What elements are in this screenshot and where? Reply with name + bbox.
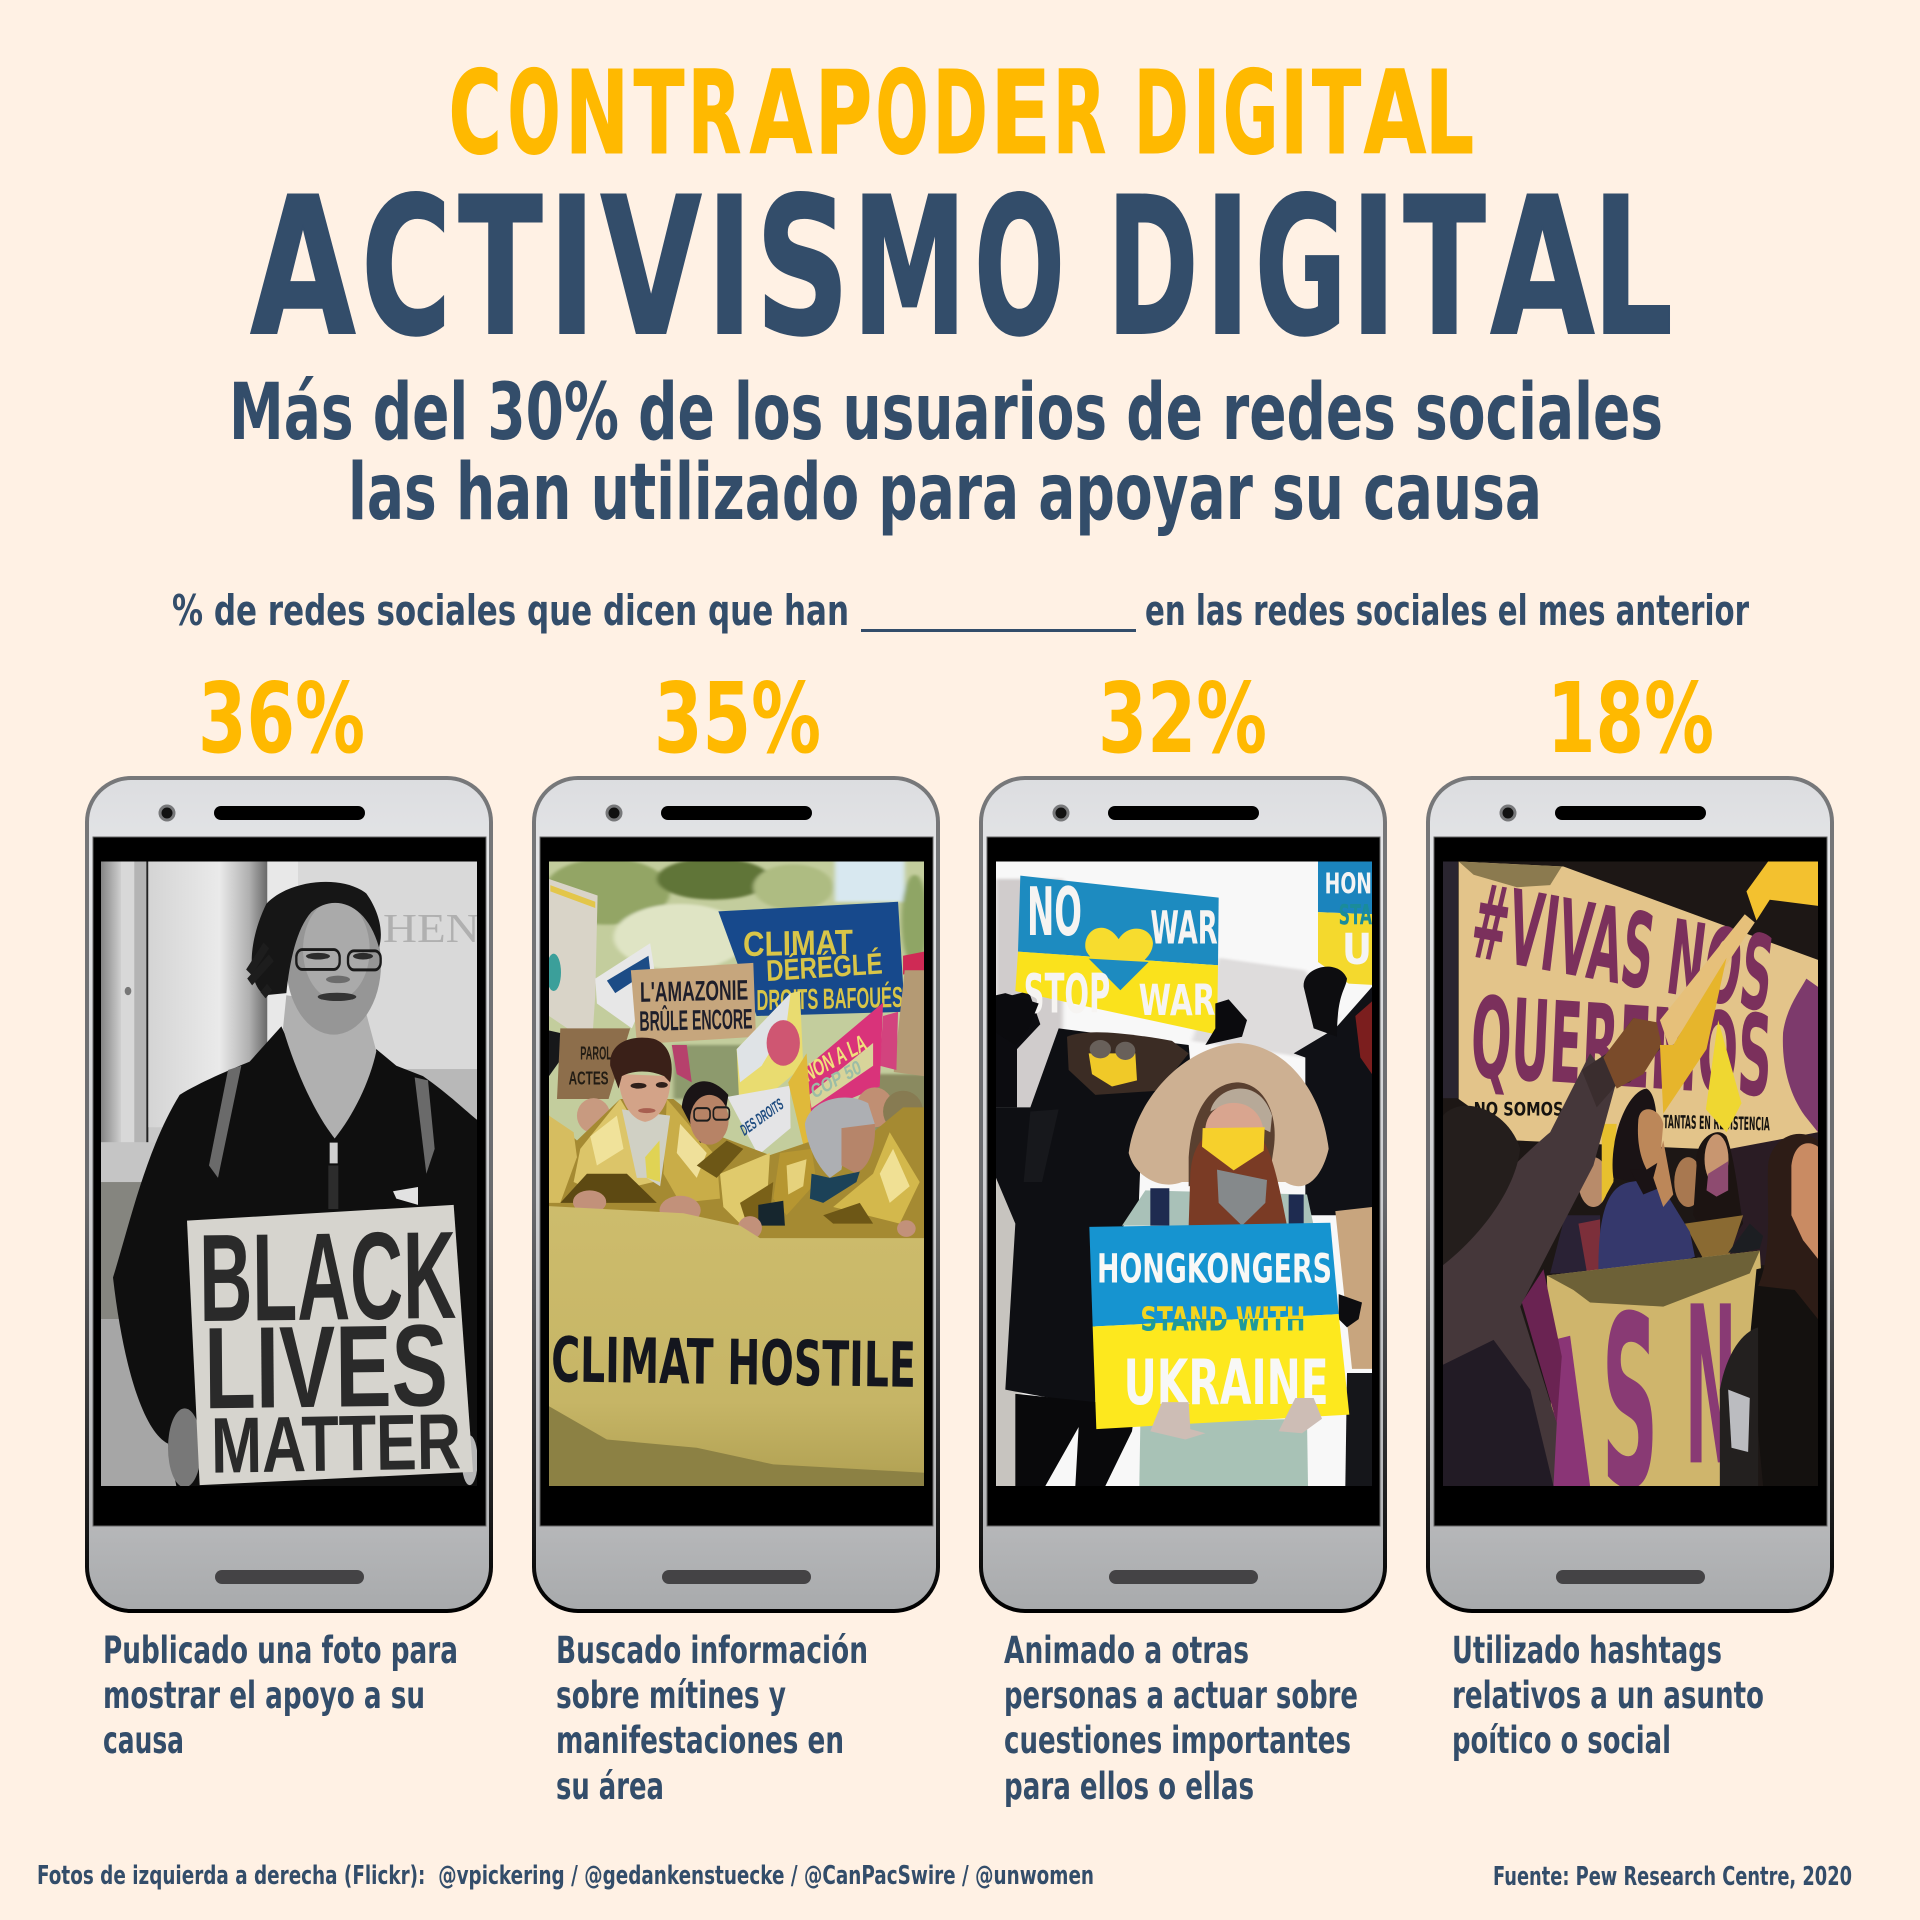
title: Contrapoder digital: C (449, 47, 502, 181)
heading: Activismo digital: A (250, 157, 356, 378)
caption: looked up rallies: manifestaciones en (556, 1719, 844, 1762)
heading: Activismo digital: I (548, 157, 596, 378)
photo: Ukraine solidarity rally: WAR (1150, 901, 1218, 954)
caption: looked up rallies: sobre mítines y (556, 1674, 786, 1717)
caption: used hashtags: Utilizado hashtags (1452, 1629, 1722, 1672)
title: Contrapoder digital: N (565, 47, 629, 181)
caption: encouraged others: cuestiones importantes (1004, 1719, 1351, 1762)
photo: Black Lives Matter protester: HEN (383, 906, 480, 952)
panel: photo post (87, 662, 491, 1762)
heading: Activismo digital: L (1592, 157, 1673, 378)
subtitle (229, 368, 1663, 538)
title: Contrapoder digital: O (876, 47, 928, 181)
title: Contrapoder digital: R (1053, 47, 1106, 181)
photo: Ukraine solidarity rally: STAND WITH (1140, 1301, 1305, 1340)
caption: photo post: mostrar el apoyo a su (103, 1674, 425, 1717)
heading: Activismo digital: T (458, 157, 543, 378)
title: Contrapoder digital: A (750, 47, 812, 181)
caption: used hashtags: poítico o social (1452, 1719, 1671, 1762)
title: Contrapoder digital: R (688, 47, 741, 181)
phone frame (981, 778, 1385, 1611)
photo: Ukraine solidarity rally: HONGKONGERS (1097, 1245, 1332, 1292)
photo: climate march: ACTES (569, 1068, 609, 1089)
caption: looked up rallies: Buscado información (556, 1629, 868, 1672)
survey prompt with blank: % de redes sociales que dicen que han (172, 586, 849, 635)
photo: Ukraine solidarity rally: NO (1027, 874, 1082, 952)
panel: looked up rallies (534, 662, 938, 1808)
footer: photo credits: Fotos de izquierda a derecha (Flickr): @vpickering / @gedankenstuecke / @CanPacSwire / @unwomen (37, 1861, 1094, 1891)
photo: climate march: PAROL (580, 1043, 612, 1064)
photo: climate march: BRÛLE ENCORE (639, 1002, 753, 1038)
caption: encouraged others: para ellos o ellas (1004, 1765, 1254, 1808)
caption: encouraged others: Animado a otras (1004, 1629, 1249, 1672)
heading: Activismo digital: I (1205, 157, 1250, 378)
caption: photo post: Publicado una foto para (103, 1629, 458, 1672)
statistic 36%: 36% (198, 662, 365, 775)
heading: Activismo digital: I (1351, 157, 1396, 378)
phone frame (87, 778, 491, 1611)
title: Contrapoder digital: O (508, 47, 560, 181)
heading: Activismo digital: D (1107, 157, 1198, 378)
caption: encouraged others: personas a actuar sobre (1004, 1674, 1358, 1717)
survey prompt with blank (172, 586, 1749, 635)
photo: Ukraine solidarity rally: U (1342, 925, 1372, 975)
title: Contrapoder digital: L (1425, 47, 1474, 181)
title: Contrapoder digital: I (1192, 47, 1221, 181)
photo: Vivas nos queremos march: NO SOMOS (1474, 1099, 1563, 1120)
photo: climate march: L'AMAZONIE (640, 975, 748, 1008)
panel: used hashtags (1428, 662, 1832, 1762)
photo: Vivas nos queremos march (1443, 862, 1818, 1541)
photo: Black Lives Matter protester: LIVES (204, 1302, 448, 1434)
photo: Ukraine solidarity rally: UKRAINE (1124, 1348, 1329, 1420)
heading: Activismo digital: A (1490, 157, 1595, 378)
photo: Black Lives Matter protester (101, 862, 480, 1490)
heading: Activismo digital: M (852, 157, 966, 378)
heading: Activismo digital: C (361, 157, 451, 378)
statistic 32%: 32% (1098, 662, 1267, 775)
photo: climate march (549, 862, 924, 1486)
photo: Vivas nos queremos march: S (1602, 1266, 1658, 1541)
heading: Activismo digital: S (755, 157, 850, 378)
title: Contrapoder digital: I (1280, 47, 1308, 181)
photo: climate march: COP 50 (808, 1056, 864, 1103)
heading: Activismo digital: O (974, 157, 1065, 378)
caption: photo post: causa (103, 1719, 184, 1762)
phone frame (534, 778, 938, 1611)
caption: used hashtags: relativos a un asunto (1452, 1674, 1764, 1717)
heading: Activismo digital: I (707, 157, 752, 378)
photo: Black Lives Matter protester: MATTER (211, 1398, 462, 1490)
title: Contrapoder digital: P (815, 47, 872, 181)
title: Contrapoder digital: T (634, 47, 684, 181)
photo: Ukraine solidarity rally: STOP (1024, 963, 1110, 1026)
photo: Ukraine solidarity rally: WAR (1139, 977, 1215, 1026)
photo: Ukraine solidarity rally (996, 862, 1372, 1486)
heading: Activismo digital: V (600, 157, 702, 378)
title: Contrapoder digital: T (1312, 47, 1361, 181)
title: Contrapoder digital: E (990, 47, 1051, 181)
photo: climate march: DÉRÉGLÉ (765, 946, 883, 988)
caption: photo post (103, 1629, 458, 1762)
photo: climate march: NON A LA (800, 1028, 870, 1087)
phone frame (1428, 778, 1832, 1611)
statistic 35%: 35% (654, 662, 821, 775)
heading: Activismo digital: T (1403, 157, 1486, 378)
title: Contrapoder digital: G (1223, 47, 1278, 181)
caption: encouraged others (1004, 1629, 1358, 1808)
caption: looked up rallies: su área (556, 1765, 664, 1808)
caption: looked up rallies (556, 1629, 868, 1808)
title: Contrapoder digital: D (933, 47, 988, 181)
title: Contrapoder digital: D (1134, 47, 1189, 181)
statistic 18%: 18% (1547, 662, 1714, 775)
title: Contrapoder digital: A (1364, 47, 1426, 181)
heading: Activismo digital: G (1255, 157, 1347, 378)
caption: used hashtags (1452, 1629, 1764, 1762)
photo: climate march: DES DROITS (738, 1095, 786, 1140)
photo: climate march: CLIMAT (743, 922, 853, 964)
panel: encouraged others (981, 662, 1385, 1808)
